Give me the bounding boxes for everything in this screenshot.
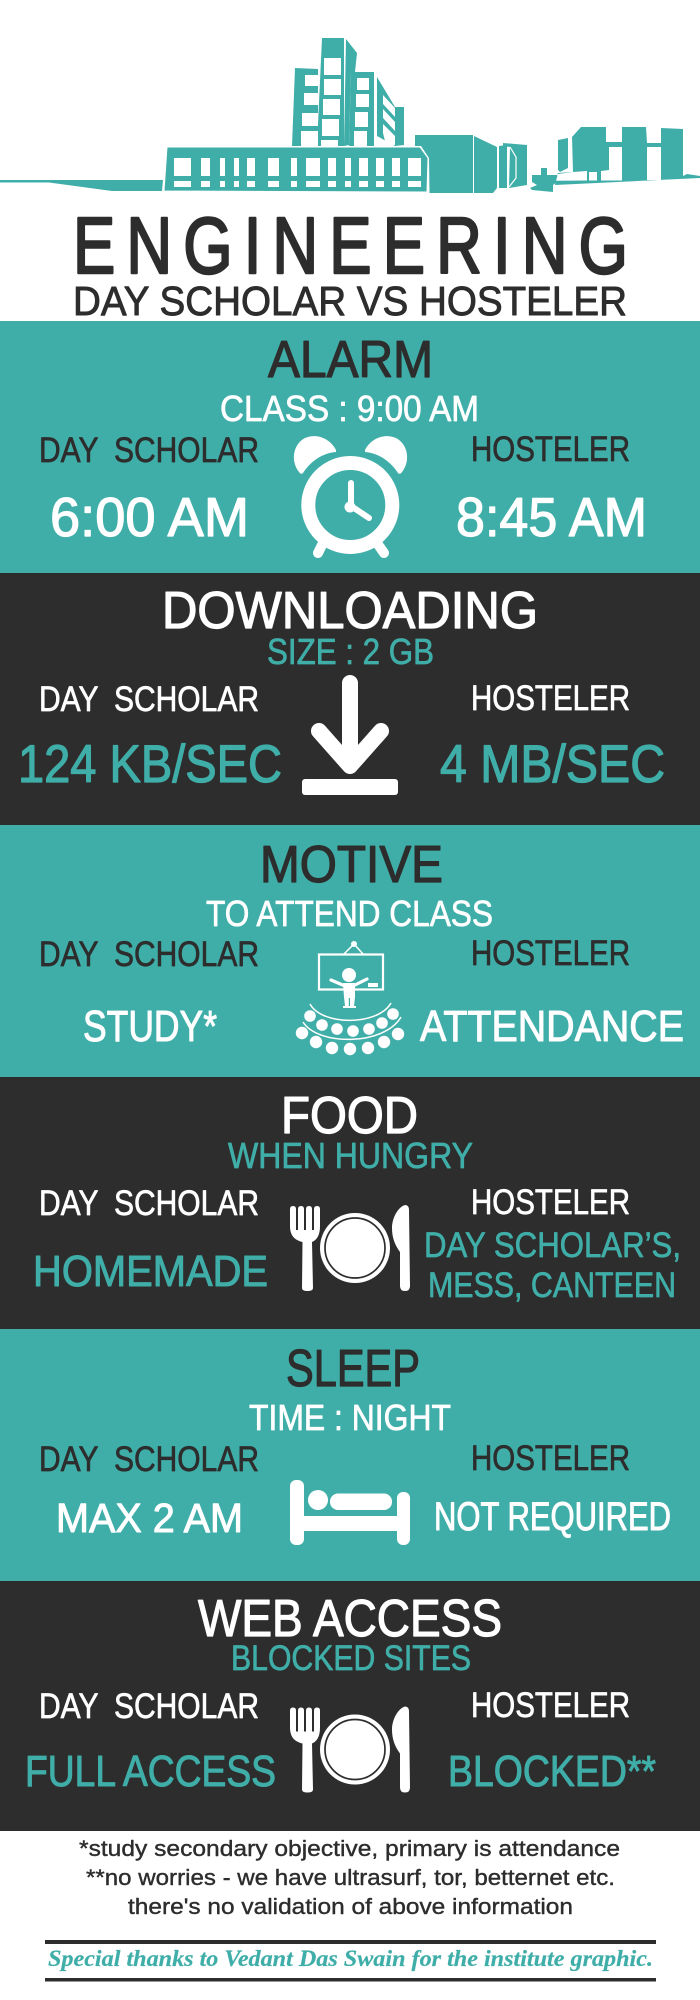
icon: download arrow [302, 683, 398, 795]
panel: alarm: 6:00 AM [50, 486, 249, 548]
footnotes: *study secondary objective, primary is attendance [79, 1836, 620, 1861]
panel: food: FOOD [281, 1087, 418, 1145]
panel: alarm: CLASS : 9:00 AM [220, 388, 479, 429]
panel: food: HOMEMADE [33, 1247, 268, 1296]
panel: motive: HOSTELER [471, 934, 630, 973]
panel: downloading: 4 MB/SEC [440, 735, 665, 794]
footnotes: **no worries - we have ultrasurf, tor, betternet etc. [86, 1865, 615, 1890]
icon: plate with fork and knife [290, 1205, 410, 1291]
panel: web access [0, 1581, 700, 1831]
panel: motive: STUDY* [83, 1002, 217, 1051]
panel: alarm: 8:45 AM [456, 486, 647, 548]
panel: downloading [0, 573, 700, 825]
panel: sleep: HOSTELER [471, 1439, 630, 1478]
panel: sleep: MAX 2 AM [56, 1495, 243, 1541]
panel: sleep: DAY SCHOLAR [39, 1440, 259, 1479]
credit line [45, 1940, 656, 1982]
icon: plate with fork and knife [290, 1706, 410, 1792]
panel: downloading: 124 KB/SEC [18, 735, 282, 794]
panel: alarm: ALARM [268, 331, 433, 389]
icon: classroom [296, 941, 404, 1055]
panel: downloading: HOSTELER [471, 679, 630, 718]
panel: downloading: SIZE : 2 GB [267, 631, 434, 672]
panel: alarm: DAY SCHOLAR [39, 431, 259, 470]
subtitle: DAY SCHOLAR VS HOSTELER [73, 278, 627, 324]
icon: alarm clock [294, 436, 407, 553]
panel: web access: BLOCKED SITES [231, 1639, 471, 1678]
panel: downloading: DAY SCHOLAR [39, 680, 259, 719]
panel: alarm: HOSTELER [471, 430, 630, 469]
panel: food: HOSTELER [471, 1183, 630, 1222]
panel: web access: FULL ACCESS [25, 1747, 276, 1796]
panel: web access: HOSTELER [471, 1686, 630, 1725]
panel: sleep: TIME : NIGHT [249, 1397, 451, 1438]
panel: motive: DAY SCHOLAR [39, 935, 259, 974]
panel: food: WHEN HUNGRY [228, 1135, 473, 1176]
panel: downloading: DOWNLOADING [162, 582, 538, 640]
panel: web access: WEB ACCESS [198, 1590, 502, 1648]
panel: motive [0, 825, 700, 1077]
credit line: Special thanks to Vedant Das Swain for the institute graphic. [48, 1946, 653, 1971]
panel: food [0, 1077, 700, 1329]
footnotes [79, 1836, 620, 1919]
panel: food: DAY SCHOLAR [39, 1184, 259, 1223]
panel: alarm [0, 321, 700, 573]
institute building graphic [0, 38, 700, 193]
panel: sleep: SLEEP [286, 1340, 420, 1398]
footnotes: there's no validation of above information [128, 1894, 573, 1919]
panel: motive: MOTIVE [260, 836, 443, 894]
panel: web access: DAY SCHOLAR [39, 1687, 259, 1726]
panel: sleep [0, 1329, 700, 1581]
panel: motive: TO ATTEND CLASS [206, 893, 493, 934]
panel: web access: BLOCKED** [448, 1747, 656, 1796]
icon: bed [290, 1480, 410, 1545]
